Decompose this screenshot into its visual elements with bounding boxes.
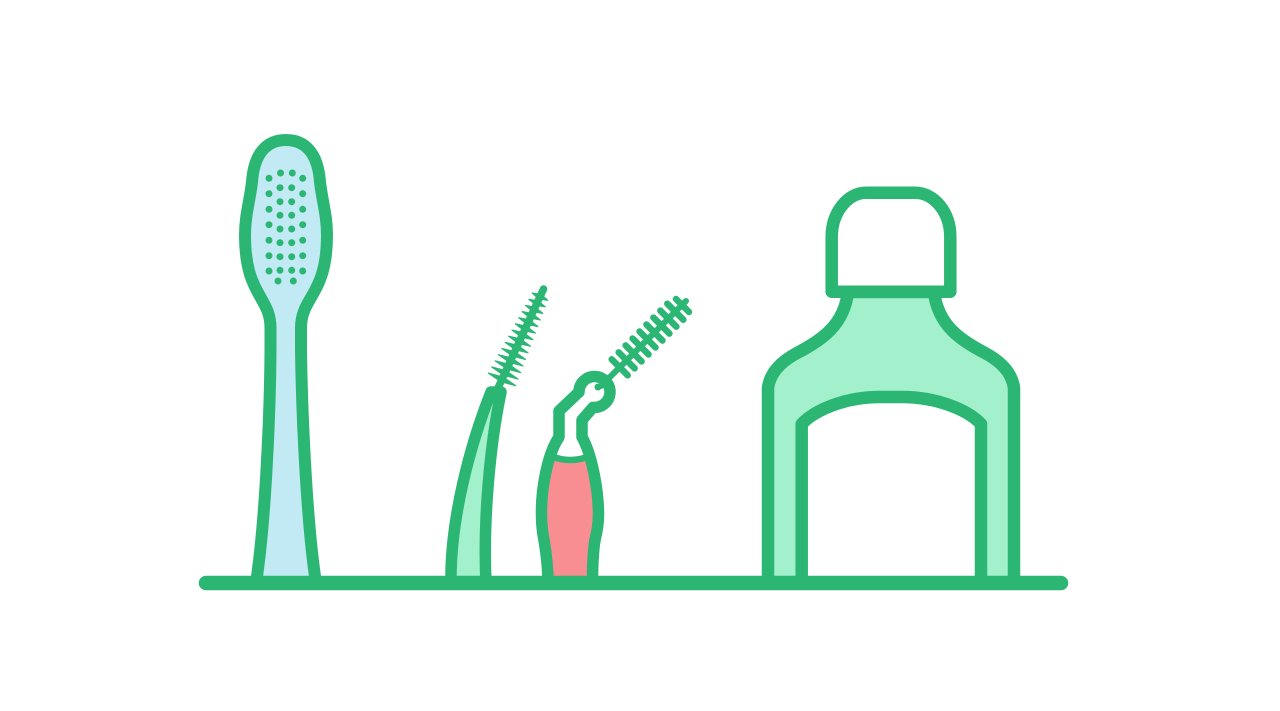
brush ball notch	[594, 384, 602, 390]
pick bristles	[484, 283, 557, 394]
pick handle	[451, 392, 501, 583]
shelf line	[206, 576, 1061, 590]
icon: toothbrush	[245, 140, 327, 583]
icon: curved interdental pick	[451, 283, 557, 583]
bottle body	[768, 292, 1014, 583]
brush wire and bristles	[601, 299, 689, 386]
bottle label	[802, 397, 981, 583]
brush handle pink grip	[542, 458, 598, 583]
bottle cap	[832, 193, 950, 292]
brush handle outline	[541, 376, 610, 583]
toothbrush bristle dots	[266, 170, 306, 284]
icon: angled interdental brush	[541, 299, 689, 583]
brush grip divider	[551, 456, 590, 460]
icon: mouthwash bottle	[768, 193, 1014, 583]
